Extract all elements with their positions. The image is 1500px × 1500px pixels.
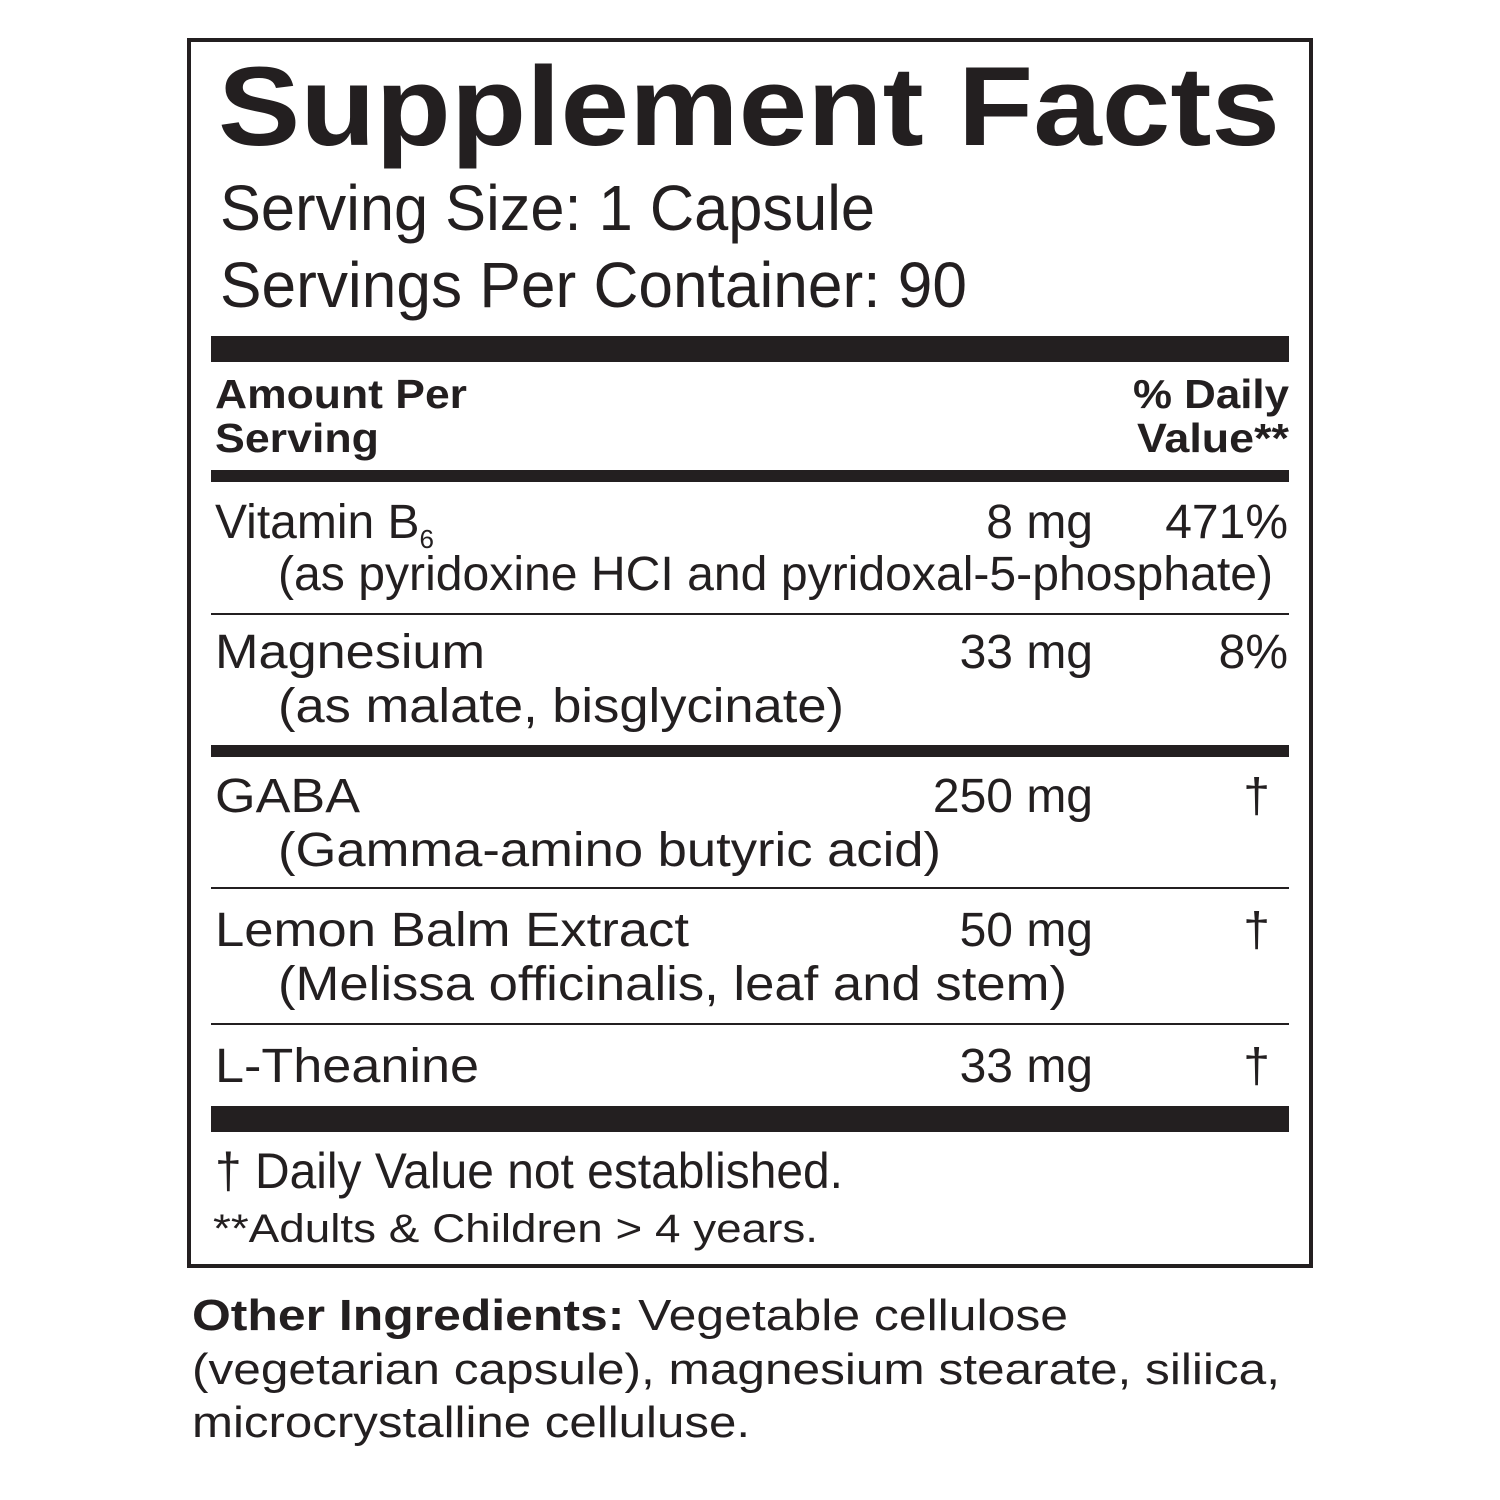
- row: vitamin B6: Vitamin B: [215, 496, 420, 549]
- footnote: daily value: † Daily Value not established.: [215, 1143, 843, 1199]
- row: magnesium: 8%: [1219, 626, 1288, 679]
- header: amount per serving: [215, 371, 1289, 461]
- row: L-theanine: L-Theanine: [215, 1040, 479, 1093]
- serving size: Serving Size: 1 Capsule: [220, 172, 875, 244]
- servings per container: Servings Per Container: 90: [220, 249, 967, 321]
- other ingredients text: microcrystalline celluluse.: [192, 1398, 750, 1447]
- row: magnesium: [215, 626, 1288, 733]
- row: vitamin B6: 471%: [1165, 496, 1288, 549]
- row: lemon balm: [215, 904, 1270, 1011]
- row: GABA: †: [1243, 770, 1270, 823]
- row: GABA: [215, 770, 1270, 877]
- row: lemon balm: Lemon Balm Extract: [215, 904, 689, 957]
- row: vitamin B6: 6: [420, 524, 434, 554]
- other ingredients text: Other Ingredients: Vegetable cellulose: [192, 1291, 1068, 1340]
- row: L-theanine: 33 mg: [960, 1040, 1093, 1093]
- header: amount per serving: Amount Per: [215, 371, 467, 417]
- header: amount per serving: Value**: [1137, 415, 1289, 461]
- row: magnesium: 33 mg: [960, 626, 1093, 679]
- row: GABA: GABA: [215, 770, 360, 823]
- header: amount per serving: Serving: [215, 415, 379, 461]
- row: magnesium: Magnesium: [215, 626, 485, 679]
- panel: supplement facts box: [189, 40, 1311, 1266]
- other ingredients text: (vegetarian capsule), magnesium stearate, siliica,: [192, 1345, 1280, 1394]
- row: magnesium: (as malate, bisglycinate): [278, 680, 844, 733]
- title: Supplement Facts: [218, 44, 1280, 169]
- row: lemon balm: †: [1243, 904, 1270, 957]
- footnote: adults: **Adults & Children > 4 years.: [213, 1207, 818, 1251]
- row: lemon balm: 50 mg: [960, 904, 1093, 957]
- row: L-theanine: [215, 1040, 1270, 1093]
- header: amount per serving: % Daily: [1133, 371, 1289, 417]
- row: vitamin B6: [215, 496, 1288, 601]
- row: vitamin B6: (as pyridoxine HCI and pyridoxal-5-phosphate): [278, 548, 1273, 601]
- row: L-theanine: †: [1243, 1040, 1270, 1093]
- row: GABA: (Gamma-amino butyric acid): [278, 824, 941, 877]
- row: lemon balm: (Melissa officinalis, leaf and stem): [278, 958, 1067, 1011]
- row: vitamin B6: 8 mg: [986, 496, 1093, 549]
- other ingredients text: [192, 1291, 1280, 1447]
- row: GABA: 250 mg: [933, 770, 1093, 823]
